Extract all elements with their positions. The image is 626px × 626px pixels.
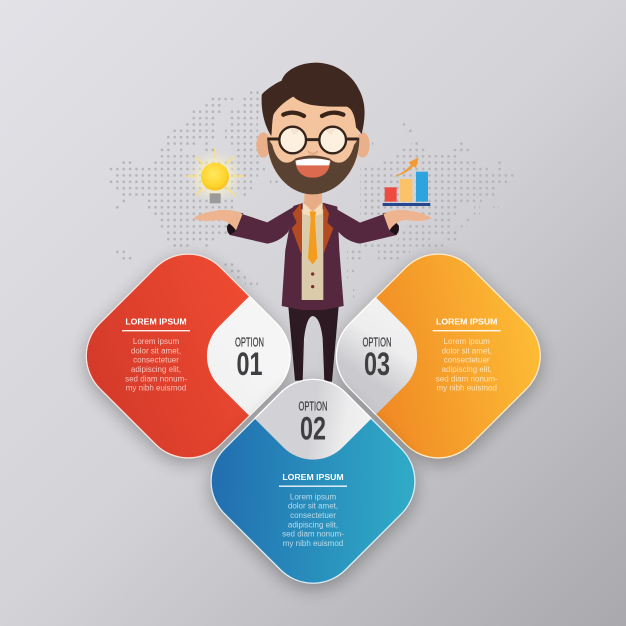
panel: option 01 red — [77, 250, 296, 472]
white tab — [336, 297, 418, 415]
eyes — [291, 126, 335, 134]
neck — [304, 188, 322, 215]
white tab — [254, 378, 372, 460]
bulb rays — [187, 148, 243, 196]
left cuff — [227, 212, 243, 235]
ears — [256, 132, 370, 158]
body text: Lorem ipsum — [444, 337, 490, 346]
body text: dolor sit amet, — [288, 502, 338, 511]
body text: consectetuer — [444, 356, 490, 365]
white tab — [206, 296, 291, 416]
character: businessman — [193, 63, 432, 382]
icon: bar chart — [383, 157, 430, 206]
option label: OPTION — [235, 335, 264, 350]
blue bar — [416, 172, 428, 202]
bulb base — [210, 193, 221, 203]
red diamond — [67, 235, 309, 477]
collar — [303, 202, 323, 216]
body text: my nibh euismod — [126, 384, 186, 393]
chart base — [383, 203, 430, 206]
right cuff — [383, 212, 399, 235]
body text: sed diam nonum- — [125, 374, 187, 383]
body text: Lorem ipsum — [133, 337, 179, 346]
body text: my nibh euismod — [283, 539, 343, 548]
body text: my nibh euismod — [436, 384, 497, 393]
body text: sed diam nonum- — [436, 374, 498, 383]
teeth — [296, 158, 330, 165]
right hand — [383, 210, 432, 230]
right sleeve — [329, 205, 399, 244]
option label: OPTION — [362, 335, 392, 350]
panel: option 03 orange — [332, 250, 549, 472]
body text: dolor sit amet, — [131, 346, 181, 355]
blue diamond — [192, 360, 434, 602]
body text: adipiscing elit, — [442, 365, 492, 374]
option number: 02 — [300, 410, 326, 446]
red bar — [385, 187, 397, 202]
body text: consectetuer — [290, 511, 336, 520]
heading: LOREM IPSUM — [282, 472, 344, 482]
heading: LOREM IPSUM — [125, 316, 187, 326]
vest — [302, 209, 323, 300]
option label: OPTION — [298, 399, 328, 414]
lapel left — [292, 203, 302, 256]
lapel right — [323, 203, 333, 254]
icon: light bulb — [187, 148, 243, 203]
body text: consectetuer — [133, 356, 179, 365]
nose — [308, 152, 317, 154]
bulb glass — [201, 163, 229, 191]
orange bar — [400, 179, 412, 202]
left hand — [193, 210, 243, 230]
growth arrow — [393, 157, 419, 177]
orange diamond — [317, 235, 559, 477]
beard — [267, 137, 359, 194]
left sleeve — [227, 205, 297, 244]
buttons — [311, 272, 314, 288]
body text: Lorem ipsum — [290, 492, 336, 501]
body text: adipiscing elit, — [288, 520, 338, 529]
tie — [308, 211, 317, 264]
glasses — [267, 127, 359, 153]
eyebrows — [283, 113, 343, 116]
trousers — [288, 307, 339, 382]
body text: sed diam nonum- — [282, 530, 344, 539]
option number: 03 — [364, 346, 390, 382]
jacket — [282, 203, 344, 310]
mouth — [295, 158, 331, 178]
face — [268, 92, 359, 193]
hair — [262, 63, 365, 136]
heading: LOREM IPSUM — [436, 316, 497, 326]
dotted world map — [109, 89, 514, 300]
option number: 01 — [236, 346, 262, 382]
body text: adipiscing elit, — [131, 365, 181, 374]
panel: option 02 blue — [202, 375, 424, 597]
body text: dolor sit amet, — [442, 346, 492, 355]
